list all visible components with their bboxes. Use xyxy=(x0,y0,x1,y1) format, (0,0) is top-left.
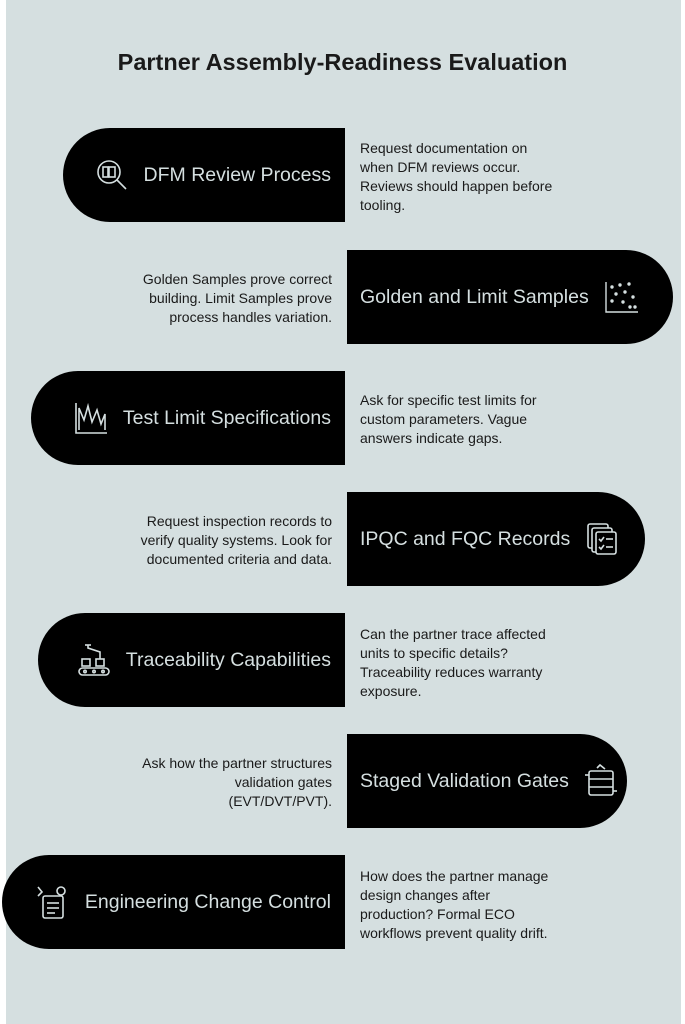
description: ECO: How does the partner manage xyxy=(360,868,548,884)
description: Golden: building. Limit Samples prove xyxy=(149,290,332,306)
description: Test limits: answers indicate gaps. xyxy=(360,430,502,446)
description: DFM: Reviews should happen before xyxy=(360,178,552,194)
icon: chart xyxy=(75,403,107,434)
pill: DFM Review Process xyxy=(63,128,345,222)
icon: magnifier document xyxy=(97,160,126,190)
description: Staged xyxy=(142,755,332,809)
pill: Engineering Change Control: Engineering Change Control xyxy=(85,890,331,912)
description: Traceability: Can the partner trace affected xyxy=(360,626,546,642)
description: Test limits: Ask for specific test limits for xyxy=(360,392,537,408)
pill: IPQC and FQC Records: IPQC and FQC Records xyxy=(360,528,570,550)
description: DFM: tooling. xyxy=(360,197,405,213)
description: IPQC xyxy=(140,513,332,567)
pill: Golden and Limit Samples xyxy=(347,250,673,344)
description: ECO: workflows prevent quality drift. xyxy=(360,925,548,941)
pill: Staged Validation Gates: Staged Validation Gates xyxy=(360,770,569,792)
description: IPQC: verify quality systems. Look for xyxy=(141,532,332,548)
description: IPQC: Request inspection records to xyxy=(147,513,332,529)
icon: server stack gates xyxy=(585,764,617,796)
description: Traceability xyxy=(360,626,546,699)
description: Staged: validation gates xyxy=(235,774,332,790)
icon: conveyor robot xyxy=(78,644,110,676)
icon: engineering clipboard xyxy=(37,886,66,919)
icon: documents checklist xyxy=(587,523,617,555)
description: ECO: production? Formal ECO xyxy=(360,906,515,922)
pill: Test Limit Specifications xyxy=(31,371,345,465)
pill: Traceability Capabilities: Traceability Capabilities xyxy=(126,648,331,670)
description: ECO xyxy=(360,868,548,941)
pill: Staged Validation Gates xyxy=(347,734,627,828)
description: Traceability: exposure. xyxy=(360,683,421,699)
pill: Test Limit Specifications: Test Limit Specifications xyxy=(123,406,331,428)
description: DFM xyxy=(360,140,552,213)
description: Traceability: Traceability reduces warranty xyxy=(360,664,542,680)
description: DFM: when DFM reviews occur. xyxy=(360,159,520,175)
description: Traceability: units to specific details? xyxy=(360,645,508,661)
description: Staged: Ask how the partner structures xyxy=(142,755,332,771)
description: IPQC: documented criteria and data. xyxy=(147,551,332,567)
icon: scatter plot xyxy=(605,282,638,313)
pill: Traceability Capabilities xyxy=(38,613,345,707)
description: Staged: (EVT/DVT/PVT). xyxy=(229,793,332,809)
pill: Engineering Change Control xyxy=(2,855,345,949)
description: ECO: design changes after xyxy=(360,887,490,903)
description: Golden: process handles variation. xyxy=(169,309,332,325)
description: Test limits: custom parameters. Vague xyxy=(360,411,527,427)
pill: DFM Review Process: DFM Review Process xyxy=(144,164,331,186)
pill: IPQC and FQC Records xyxy=(347,492,645,586)
description: DFM: Request documentation on xyxy=(360,140,527,156)
description: Test limits xyxy=(360,392,537,446)
pill: Golden and Limit Samples: Golden and Limit Samples xyxy=(360,286,589,308)
description: Golden: Golden Samples prove correct xyxy=(143,271,332,287)
description: Golden xyxy=(143,271,332,325)
title: Partner Assembly-Readiness Evaluation xyxy=(118,49,567,75)
